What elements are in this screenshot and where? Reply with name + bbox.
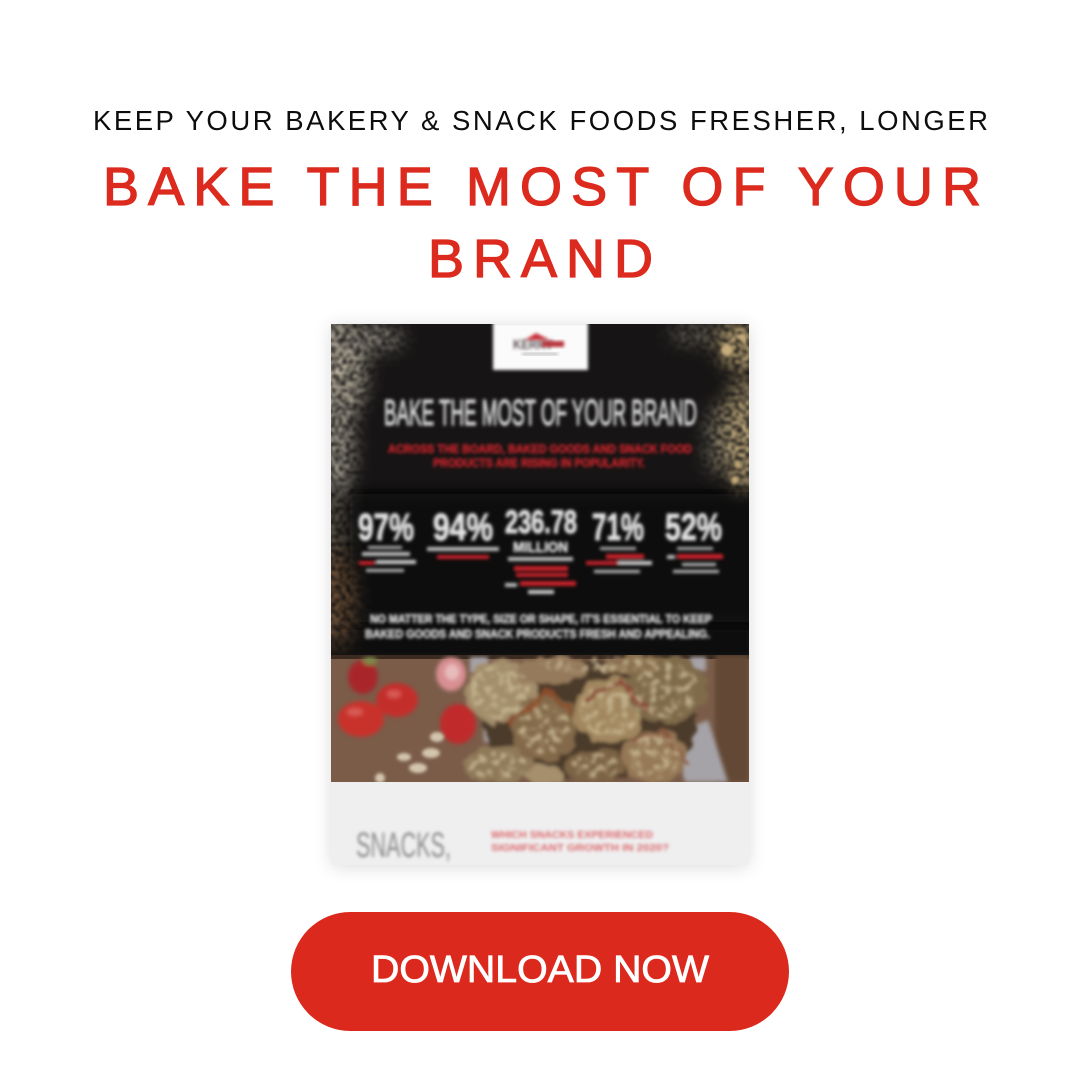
footer question (491, 829, 669, 854)
stat: 236.78 million (505, 504, 577, 594)
poster thumbnail (331, 324, 749, 864)
stat: 236.78 million: 236.78 (505, 504, 577, 540)
stat: 94% (427, 507, 499, 559)
poster subheading (388, 442, 692, 470)
button label: DOWNLOAD NOW (371, 949, 709, 991)
stat: 52%: 52% (665, 507, 722, 549)
main title (103, 157, 981, 289)
footer question: SIGNIFICANT GROWTH IN 2020? (491, 842, 669, 854)
stat: 71% (586, 507, 652, 573)
poster body statement: BAKED GOODS AND SNACK PRODUCTS FRESH AND APPEALING. (365, 629, 710, 641)
dark stats band (350, 494, 770, 622)
footer question: WHICH SNACKS EXPERIENCED (491, 829, 653, 841)
poster body statement: NO MATTER THE TYPE, SIZE OR SHAPE, IT'S ESSENTIAL TO KEEP (370, 614, 712, 626)
poster subheading: PRODUCTS ARE RISING IN POPULARITY. (433, 456, 645, 470)
flour and crumbs scatter (331, 324, 749, 654)
stat: 236.78 million: MILLION (513, 539, 568, 556)
logo box: KERRY (513, 336, 554, 352)
baking paper patches (470, 657, 728, 782)
cookie crumbs texture (467, 657, 699, 779)
logo box (493, 322, 588, 370)
stat: 94%: 94% (433, 507, 493, 549)
main title: BAKE THE MOST OF YOUR (103, 157, 981, 217)
panel: food photo (331, 655, 749, 784)
cookies (461, 655, 707, 784)
download button (291, 912, 789, 1031)
stat: 97% (358, 507, 416, 572)
panel: dark header (331, 324, 749, 655)
poster heading: BAKE THE MOST OF YOUR BRAND (384, 392, 697, 433)
snacks label: SNACKS, (356, 826, 451, 865)
poster shadow (331, 326, 749, 867)
stat: 52% (665, 507, 723, 573)
main title: BRAND (428, 229, 653, 289)
almonds (375, 732, 444, 783)
eyebrow heading: KEEP YOUR BAKERY & SNACK FOODS FRESHER, LONGER (93, 105, 988, 136)
poster subheading: ACROSS THE BOARD, BAKED GOODS AND SNACK FOOD (388, 442, 692, 456)
stat: 71%: 71% (592, 507, 644, 549)
panel: white paper footer (331, 782, 749, 867)
poster body statement (365, 614, 712, 641)
strawberries (338, 657, 476, 744)
stat: 97%: 97% (358, 507, 414, 549)
